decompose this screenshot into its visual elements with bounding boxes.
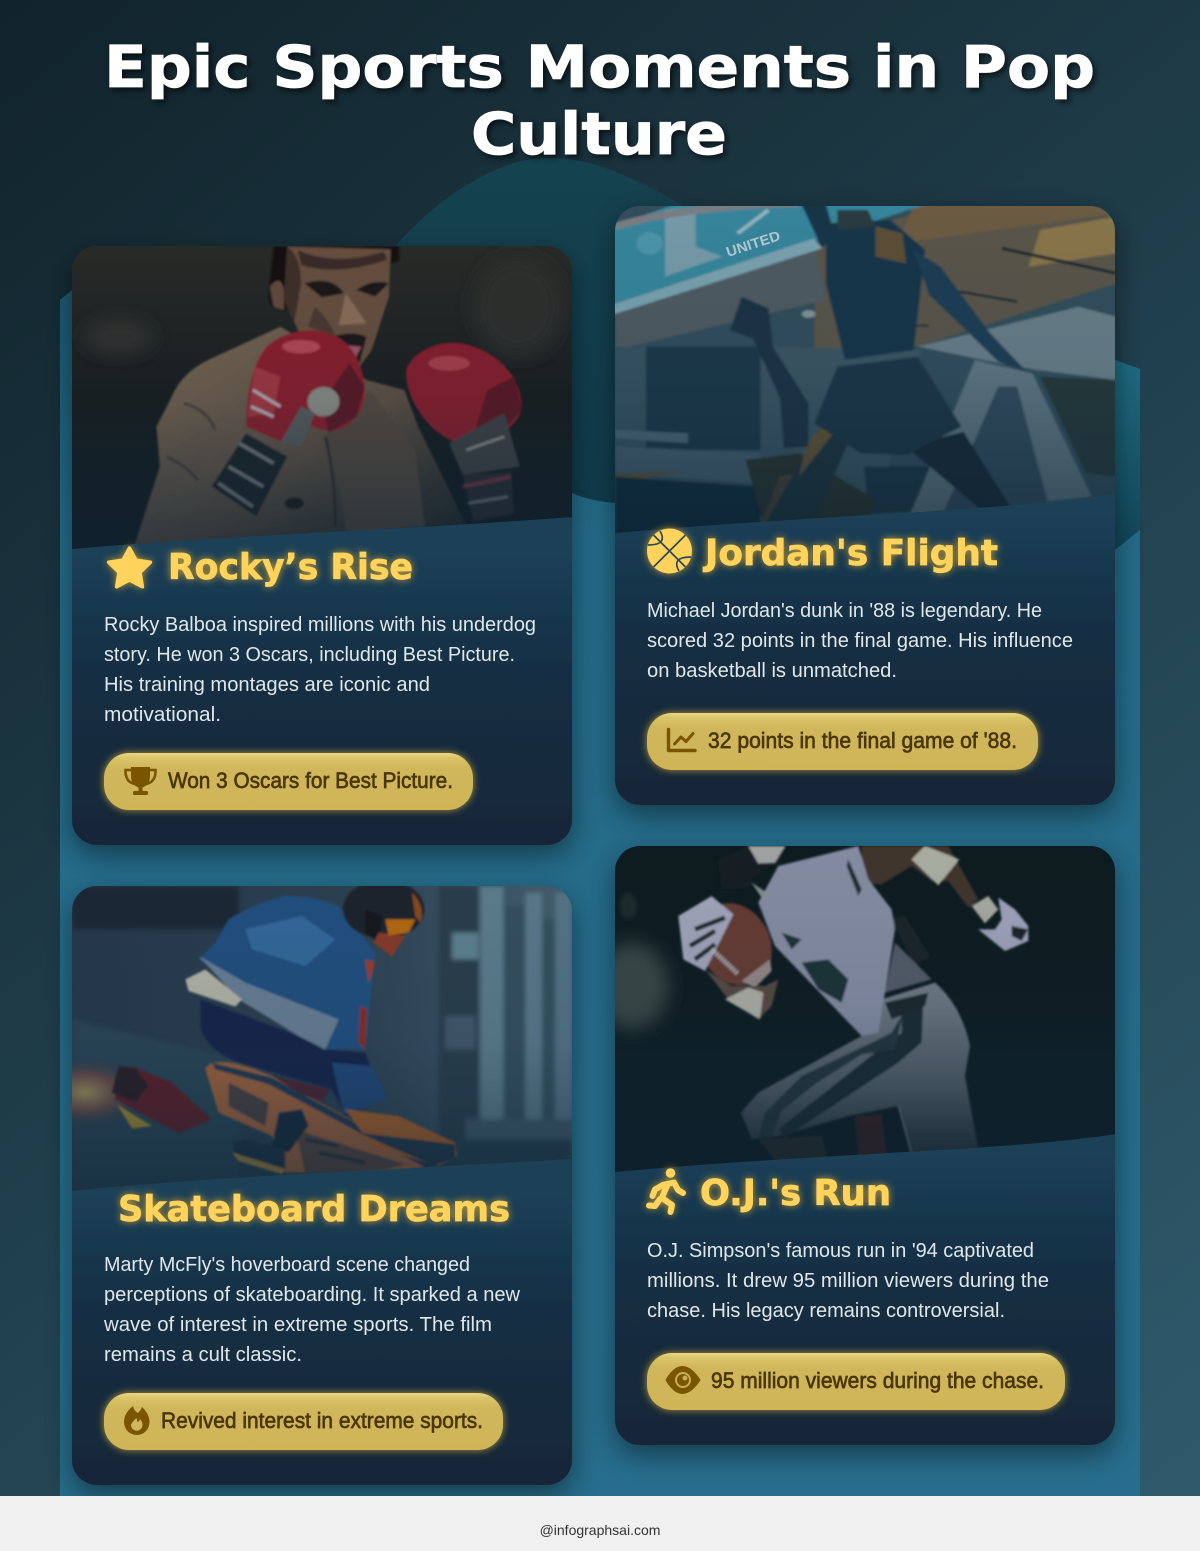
description text: story. He won 3 Oscars, including Best Picture.: [104, 644, 515, 666]
description text: Michael Jordan's dunk in '88 is legendary. He: [647, 600, 1042, 622]
description text: millions. It drew 95 million viewers during the: [647, 1270, 1049, 1292]
description text: [104, 614, 536, 726]
description text: wave of interest in extreme sports. The film: [103, 1314, 492, 1336]
callout: viewers: [647, 1353, 1065, 1410]
heading: O.J.'s Run: [649, 1168, 891, 1214]
image: football runner: [595, 846, 1115, 1176]
icon: flame: [124, 1406, 150, 1435]
image: hoverboard skater: [72, 886, 572, 1191]
heading: O.J.'s Run: O.J.'s Run: [700, 1173, 891, 1214]
description text: perceptions of skateboarding. It sparked a new: [104, 1284, 521, 1306]
icon: eye: [666, 1367, 700, 1393]
heading: Skateboard Dreams: Skateboard Dreams: [118, 1189, 510, 1230]
description text: [647, 600, 1073, 682]
panel: Jordan's Flight: [611, 203, 1117, 805]
callout: points: 32 points in the final game of '88.: [708, 728, 1017, 753]
callout: Oscars: Won 3 Oscars for Best Picture.: [168, 768, 453, 793]
panel: Rocky's Rise: [72, 246, 572, 845]
callout: points: [647, 713, 1038, 770]
icon: runner: [649, 1168, 683, 1212]
description text: [103, 1254, 521, 1366]
icon: star: [109, 548, 150, 587]
icon: trophy: [125, 767, 156, 795]
description text: His training montages are iconic and: [104, 674, 430, 696]
image lettering: UNITED sign: UNITED: [724, 227, 782, 260]
description text: Rocky Balboa inspired millions with his underdog: [104, 614, 536, 636]
description text: motivational.: [104, 704, 221, 726]
callout: extreme sports: Revived interest in extreme sports.: [161, 1408, 483, 1433]
callout: extreme sports: [104, 1393, 503, 1450]
icon: line chart: [668, 730, 695, 750]
footer: [0, 1496, 1200, 1551]
description text: [647, 1240, 1049, 1322]
description text: chase. His legacy remains controversial.: [647, 1300, 1005, 1322]
icon: basketball: [647, 528, 692, 574]
panel: O.J.'s Run: [595, 846, 1115, 1445]
title: Epic Sports Moments in Pop: [104, 33, 1095, 101]
heading: Rocky's Rise: Rocky’s Rise: [168, 547, 413, 588]
callout: Oscars: [104, 753, 473, 810]
image: Jordan statue: [611, 203, 1117, 537]
title: Culture: [471, 100, 727, 168]
heading: Jordan's Flight: Jordan's Flight: [702, 533, 998, 574]
panel: Skateboard Dreams: [22, 880, 572, 1485]
title: [104, 33, 1095, 168]
description text: remains a cult classic.: [104, 1344, 302, 1366]
description text: Marty McFly's hoverboard scene changed: [104, 1254, 470, 1276]
description text: scored 32 points in the final game. His influence: [647, 630, 1073, 652]
footer: @infographsai.com: [540, 1522, 660, 1538]
image: boxer with red gloves: [72, 246, 572, 556]
description text: on basketball is unmatched.: [647, 660, 897, 682]
description text: O.J. Simpson's famous run in '94 captivated: [647, 1240, 1034, 1262]
callout: viewers: 95 million viewers during the chase.: [711, 1368, 1044, 1393]
background wave shape: [60, 158, 1140, 1496]
